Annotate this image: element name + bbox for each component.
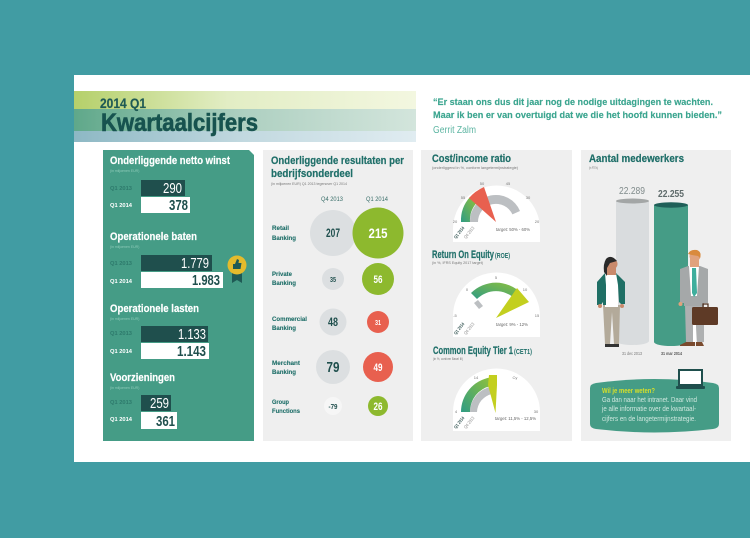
column: 31 dec 2013: 31 dec 2013 (622, 351, 642, 356)
column headers: Q1 2014 (366, 196, 388, 203)
callout text (601, 386, 697, 423)
metric: netto winst: Q1 2013 (110, 186, 132, 192)
metric: netto winst: 290 (163, 180, 182, 197)
row: retail banking: 207 (326, 226, 340, 240)
gauge: return on equity: -5 (453, 313, 458, 318)
row: private banking: 56 (374, 274, 382, 286)
metric: operationele baten: (in miljoenen EUR) (110, 245, 139, 249)
gauge: cost/income ratio: Cost/income ratio (432, 153, 511, 165)
callout text: cijfers en de langetermijnstrategie. (602, 414, 696, 423)
header band (74, 91, 416, 142)
gauge: common equity tier 1: 30 (534, 409, 539, 414)
row: merchant banking: Merchant (272, 360, 301, 367)
gauge: common equity tier 1: 4 (455, 409, 458, 414)
gauge: return on equity: 0 (466, 287, 469, 292)
metric: operationele baten: 1.779 (181, 255, 209, 272)
metric: voorzieningen: Q1 2014 (110, 417, 133, 423)
quote: “Er staan ons dus dit jaar nog de nodige uitdagingen te wachten. (433, 97, 713, 108)
icon: man with briefcase (678, 250, 718, 346)
row: private banking (272, 263, 394, 295)
column: 31 mar 2014: 31 mar 2014 (661, 351, 682, 356)
column: 31 dec 2013: 22.289 (619, 185, 645, 197)
year label: 2014 Q1 (100, 96, 146, 111)
heading: Aantal medewerkers (589, 153, 684, 165)
row: group functions (272, 396, 388, 416)
icon: woman (597, 257, 625, 347)
quote: Gerrit Zalm (433, 125, 476, 136)
callout text: Wil je meer weten? (602, 386, 655, 395)
gauge: cost/income ratio: target: 50% - 60% (496, 227, 530, 232)
quote (433, 97, 722, 136)
metric: voorzieningen: Voorzieningen (110, 372, 175, 384)
metric: operationele baten: Operationele baten (110, 231, 197, 243)
metric: operationele lasten: Q1 2014 (110, 349, 133, 355)
gauge: common equity tier 1 (433, 345, 540, 431)
row: commercial banking (272, 308, 389, 336)
metric: operationele baten: Q1 2013 (110, 261, 132, 267)
gauge: common equity tier 1: target: 11,5% - 12,5% (495, 416, 536, 421)
metric: operationele baten (110, 231, 223, 289)
title: Kwartaalcijfers (101, 109, 258, 137)
row: merchant banking: 79 (326, 359, 340, 376)
gauge: cost/income ratio: 45 (506, 181, 511, 186)
column: 31 dec 2013 (616, 185, 649, 356)
row: commercial banking: Banking (272, 325, 296, 332)
callout text: Ga dan naar het intranet. Daar vind (602, 395, 697, 404)
row: commercial banking: 31 (375, 318, 381, 327)
row: private banking: Banking (272, 280, 296, 287)
gauge: common equity tier 1: Common Equity Tier 1 (433, 345, 513, 357)
heading: (in miljoenen EUR) Q1 2013 tegenover Q1 2014 (271, 182, 347, 186)
gauge: common equity tier 1: Q1 2014 (453, 415, 466, 430)
gauge: return on equity: Return On Equity (432, 249, 495, 261)
metric: operationele baten: 1.983 (192, 272, 220, 289)
row: group functions: Group (272, 399, 289, 406)
row: group functions: 26 (374, 401, 382, 413)
row: merchant banking (272, 350, 393, 384)
heading: bedrijfsonderdeel (271, 168, 353, 180)
metric: voorzieningen (110, 372, 177, 430)
gauge: cost/income ratio: 20 (535, 219, 540, 224)
icon: thumbs-up badge (228, 256, 246, 283)
white sheet (74, 75, 750, 462)
gauge: return on equity: (ROE) (495, 251, 510, 260)
heading: (in FTE's) (589, 166, 598, 170)
metric: netto winst: Onderliggende netto winst (110, 155, 230, 167)
metric: voorzieningen: 259 (150, 395, 169, 412)
gauge: cost/income ratio: 30 (526, 195, 531, 200)
gauge: return on equity: Q4 2013 (463, 321, 476, 336)
metric: netto winst: 378 (169, 197, 188, 214)
heading: Onderliggende resultaten per (271, 155, 405, 167)
row: merchant banking: Banking (272, 369, 296, 376)
row: retail banking (272, 208, 404, 258)
gauge: common equity tier 1: Cy (513, 375, 517, 380)
gauge: return on equity: (in %, IFRS Equity 2017 target) (432, 261, 483, 265)
panel: aantal medewerkers (581, 150, 731, 441)
panel: onderliggende cijfers (103, 150, 254, 441)
heading (271, 155, 405, 186)
gauge: common equity tier 1: Q4 2013 (463, 415, 476, 430)
row: private banking: 35 (330, 275, 336, 284)
metric: voorzieningen: 361 (156, 413, 175, 430)
gauge: return on equity: 10 (523, 287, 528, 292)
row: retail banking: Banking (272, 235, 296, 242)
column: 31 mar 2014: 22.255 (658, 188, 684, 200)
metric: netto winst: Q1 2014 (110, 203, 133, 209)
row: private banking: Private (272, 271, 292, 278)
row: commercial banking: 48 (328, 315, 338, 329)
gauge: return on equity: 15 (535, 313, 540, 318)
gauge: cost/income ratio: 50 (480, 181, 485, 186)
row: merchant banking: 49 (374, 362, 382, 374)
metric: operationele lasten (110, 303, 209, 360)
gauge: cost/income ratio: Q1 2014 (453, 225, 466, 240)
metric: operationele baten: Q1 2014 (110, 279, 133, 285)
icon: laptop (676, 369, 705, 389)
metric: netto winst (110, 155, 230, 214)
gauge: return on equity: 5 (495, 275, 498, 280)
metric: voorzieningen: Q1 2013 (110, 400, 132, 406)
row: group functions: Functions (272, 408, 300, 415)
gauge: common equity tier 1: 14 (474, 375, 479, 380)
metric: netto winst: (in miljoenen EUR) (110, 169, 139, 173)
callout: wil je meer weten (590, 369, 719, 432)
row: group functions: -79 (328, 404, 338, 411)
gauge: cost/income ratio: (onderliggend in %, conform langetermijnstrategie) (432, 166, 518, 170)
row: commercial banking: Commercial (272, 316, 307, 323)
row: retail banking: 215 (368, 225, 388, 241)
metric: operationele lasten: (in miljoenen EUR) (110, 317, 139, 321)
gauge: return on equity: Q1 2014 (453, 321, 466, 336)
column headers: Q4 2013 (321, 196, 343, 203)
metric: operationele lasten: 1.143 (177, 343, 206, 360)
panel: ratios (421, 150, 572, 441)
quote: Maar ik ben er van overtuigd dat we die het hoofd kunnen bieden.” (433, 110, 722, 121)
metric: operationele lasten: Operationele lasten (110, 303, 199, 315)
gauge: cost/income ratio: Q4 2013 (463, 225, 476, 240)
row: retail banking: Retail (272, 225, 289, 232)
metric: voorzieningen: (in miljoenen EUR) (110, 386, 139, 390)
callout text: je alle informatie over de kwartaal- (601, 404, 696, 413)
gauge: return on equity: target: 9% - 12% (496, 322, 528, 327)
metric: operationele lasten: 1.133 (178, 326, 206, 343)
gauge: cost/income ratio (432, 153, 540, 242)
gauge: cost/income ratio: 55 (461, 195, 466, 200)
gauge: return on equity (432, 249, 540, 337)
gauge: common equity tier 1: (CET1) (514, 347, 532, 356)
gauge: cost/income ratio: 20 (453, 219, 458, 224)
metric: operationele lasten: Q1 2013 (110, 331, 132, 337)
column headers (321, 196, 388, 203)
column: 31 mar 2014 (654, 188, 688, 356)
gauge: common equity tier 1: (in %, conform Basel III) (433, 357, 463, 361)
heading (589, 153, 684, 170)
panel: resultaten per bedrijfsonderdeel (263, 150, 413, 441)
